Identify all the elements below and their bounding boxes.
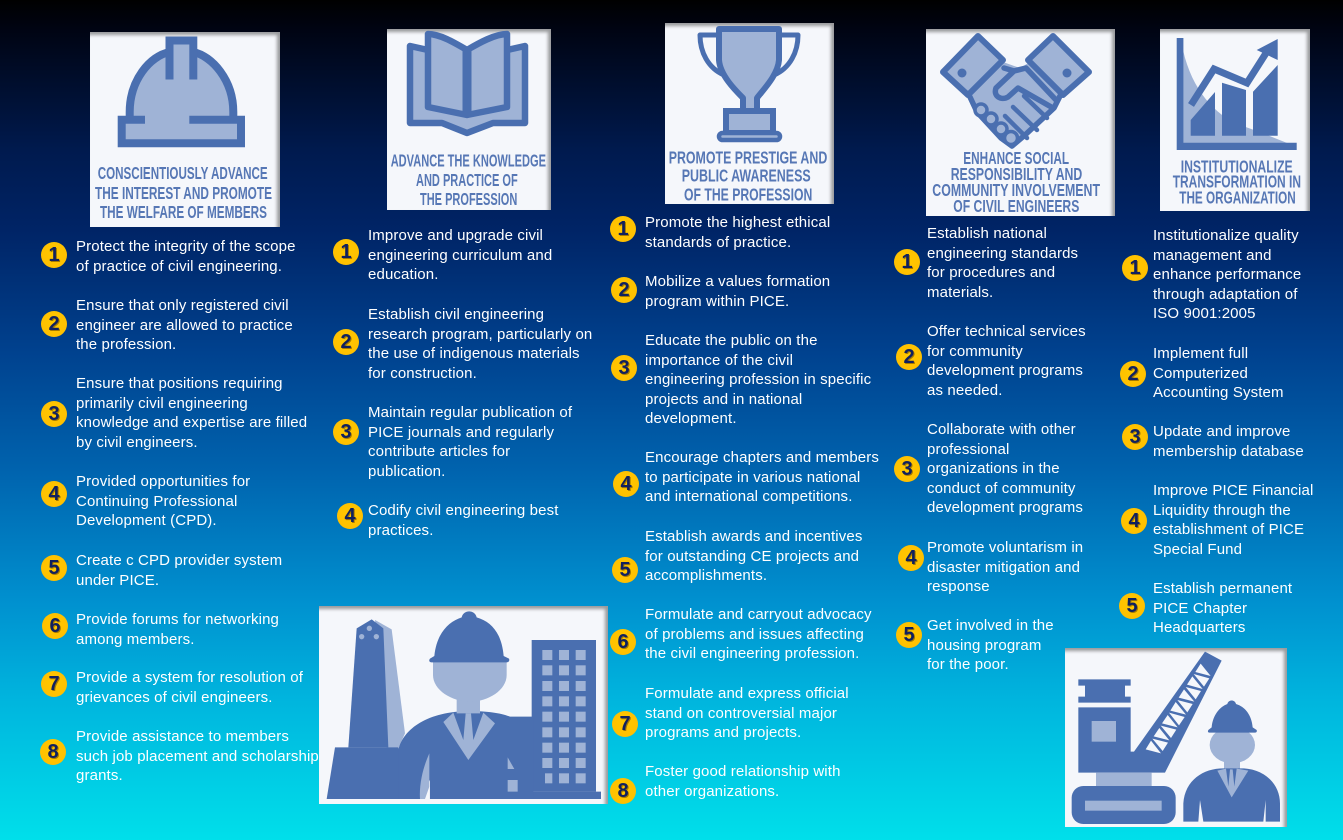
objective 1: 1 (340, 241, 352, 263)
objective 4 (613, 449, 879, 505)
objective 3: publication. (368, 463, 445, 480)
objective 1: 1 (1129, 257, 1141, 279)
objective 4 (1121, 482, 1313, 558)
objective 8: Provide assistance to members (76, 728, 289, 745)
objective 3: development programs (927, 499, 1083, 516)
objective 3: contribute articles for (368, 443, 510, 460)
objective 2: 2 (903, 346, 915, 368)
heading: welfare of members (95, 163, 272, 222)
objective 4: Continuing Professional (76, 493, 237, 510)
objective 8: Foster good relationship with (645, 763, 841, 780)
objective 4: Liquidity through the (1153, 502, 1291, 519)
objective 2: the profession. (76, 336, 176, 353)
objective 3 (611, 332, 871, 427)
objective 8: other organizations. (645, 783, 779, 800)
heading: institutionalize transformation (1173, 157, 1301, 207)
objective 5: accomplishments. (645, 567, 767, 584)
objective 7: 7 (619, 713, 631, 735)
objective 1 (894, 225, 1078, 301)
icon: growth chart (1177, 38, 1297, 150)
objective 2: Offer technical services (927, 323, 1086, 340)
icon: trophy (700, 29, 798, 140)
objective 2 (41, 297, 293, 353)
objective 5: for the poor. (927, 656, 1009, 673)
objective 5: 5 (1126, 595, 1138, 617)
objective 4: to participate in various national (645, 469, 860, 486)
objective 1: for procedures and (927, 264, 1055, 281)
objective 7: Provide a system for resolution of (76, 669, 303, 686)
objective 3: organizations in the (927, 460, 1060, 477)
objective 5: under PICE. (76, 572, 159, 589)
objective 3: engineering profession in specific (645, 371, 871, 388)
objective 3: membership database (1153, 443, 1304, 460)
objective 2: Computerized (1153, 365, 1248, 382)
objective 5 (1119, 580, 1292, 636)
objective 3: Ensure that positions requiring (76, 375, 283, 392)
icon: crane and engineer (1072, 652, 1280, 824)
objective 2 (611, 273, 830, 310)
objective 5: 5 (903, 624, 915, 646)
objective 1 (610, 214, 830, 251)
heading: social responsibility (932, 148, 1100, 216)
objective 2: Implement full (1153, 345, 1248, 362)
objective 4 (898, 539, 1083, 595)
objective 1: 1 (901, 251, 913, 273)
objective 5 (896, 617, 1054, 673)
objective 4 (337, 502, 559, 539)
column: welfare of members objectives (40, 238, 319, 784)
objective 4: response (927, 578, 990, 595)
objective 1 (41, 238, 296, 275)
objective 2: Mobilize a values formation (645, 273, 830, 290)
icon: handshake (943, 36, 1089, 146)
objective 3: development. (645, 410, 737, 427)
objective 7 (612, 685, 849, 741)
objective 3: 3 (48, 403, 60, 425)
objective 5: Get involved in the (927, 617, 1054, 634)
objective 5 (41, 552, 282, 589)
objective 4: Promote voluntarism in (927, 539, 1083, 556)
objective 5 (612, 528, 862, 584)
objective 1 (1122, 227, 1301, 322)
objective 3: primarily civil engineering (76, 395, 248, 412)
objective 8: such job placement and scholarship (76, 748, 319, 765)
objective 5: Establish permanent (1153, 580, 1292, 597)
objective 5: Create c CPD provider system (76, 552, 282, 569)
objective 3 (1122, 423, 1304, 460)
objective 1: Institutionalize quality (1153, 227, 1299, 244)
objective 1: standards of practice. (645, 234, 791, 251)
objective 4: 4 (48, 483, 60, 505)
objective 2: for community (927, 343, 1023, 360)
objective 4: Special Fund (1153, 541, 1242, 558)
objective 2: Accounting System (1153, 384, 1284, 401)
objective 8: grants. (76, 767, 123, 784)
objective 5: for outstanding CE projects and (645, 548, 859, 565)
objective 4: 4 (1128, 510, 1140, 532)
objective 1: materials. (927, 284, 993, 301)
objective 3: by civil engineers. (76, 434, 198, 451)
objective 3: Educate the public on the (645, 332, 818, 349)
objective 8: 8 (617, 780, 629, 802)
column: knowledge and practice objectives (333, 227, 592, 539)
objective 2: 2 (340, 331, 352, 353)
heading: knowledge and practice (391, 151, 546, 209)
objective 1: engineering curriculum and (368, 247, 552, 264)
objective 2: the use of indigenous materials (368, 345, 580, 362)
objective 8 (40, 728, 319, 784)
objective 1: through adaptation of (1153, 286, 1298, 303)
objective 6 (42, 611, 279, 648)
objective 3: projects and in national (645, 391, 802, 408)
objective 4: and international competitions. (645, 488, 852, 505)
column: prestige and awareness objectives (610, 214, 879, 804)
objective 2: as needed. (927, 382, 1003, 399)
objective 3: Maintain regular publication of (368, 404, 572, 421)
objective 7 (41, 669, 303, 706)
objective 3 (894, 421, 1083, 516)
objective 2: engineer are allowed to practice (76, 317, 293, 334)
objective 4: disaster mitigation and (927, 559, 1080, 576)
objective 6: Formulate and carryout advocacy (645, 606, 872, 623)
objective 6: among members. (76, 631, 195, 648)
objective 2: Establish civil engineering (368, 306, 544, 323)
objective 7: grievances of civil engineers. (76, 689, 272, 706)
objective 4: Encourage chapters and members (645, 449, 879, 466)
objective 8: 8 (47, 741, 59, 763)
objective 1: of practice of civil engineering. (76, 258, 282, 275)
objective 2 (896, 323, 1086, 399)
objective 4: establishment of PICE (1153, 521, 1304, 538)
panel: hard hat, advance the welfare of members (90, 32, 280, 227)
objective 1: 1 (48, 244, 60, 266)
objective 2: for construction. (368, 365, 477, 382)
column: institutional transformation objectives (1119, 227, 1313, 636)
objective 3: importance of the civil (645, 352, 793, 369)
objective 1: engineering standards (927, 245, 1078, 262)
objective 5: 5 (48, 557, 60, 579)
objective 3: conduct of community (927, 480, 1076, 497)
objective 1: Establish national (927, 225, 1047, 242)
objective 3: knowledge and expertise are filled (76, 414, 307, 431)
objective 5: Headquarters (1153, 619, 1245, 636)
objective 1: enhance performance (1153, 266, 1301, 283)
objective 5: 5 (619, 559, 631, 581)
objective 2: 2 (618, 279, 630, 301)
icon: open book (410, 34, 525, 133)
objective 1: ISO 9001:2005 (1153, 305, 1256, 322)
objective 2: program within PICE. (645, 293, 789, 310)
objective 7: programs and projects. (645, 724, 801, 741)
objective 8 (610, 763, 841, 804)
objective 6: the civil engineering profession. (645, 645, 859, 662)
objective 1: 1 (617, 218, 629, 240)
objective 5: housing program (927, 637, 1042, 654)
objective 2 (1120, 345, 1284, 401)
objective 4 (41, 473, 250, 529)
objective 1: Protect the integrity of the scope (76, 238, 296, 255)
objective 2: research program, particularly on (368, 326, 592, 343)
objective 4: practices. (368, 522, 434, 539)
objective 4: Provided opportunities for (76, 473, 250, 490)
objective 3: 3 (340, 421, 352, 443)
objective 4: Improve PICE Financial (1153, 482, 1313, 499)
illustration panel: engineer with tower and building (319, 606, 608, 804)
panel: handshake, social responsibility (926, 29, 1115, 216)
objective 5: Establish awards and incentives (645, 528, 862, 545)
objective 3: 3 (618, 357, 630, 379)
objective 3 (41, 375, 307, 451)
objective 3: 3 (901, 458, 913, 480)
objective 3: Collaborate with other (927, 421, 1076, 438)
objective 1: Improve and upgrade civil (368, 227, 543, 244)
objective 7: stand on controversial major (645, 705, 837, 722)
icon: hard hat (122, 40, 241, 143)
objective 3: professional (927, 441, 1009, 458)
objective 6: 6 (49, 615, 61, 637)
objective 3: Update and improve (1153, 423, 1290, 440)
objective 4: 4 (905, 547, 917, 569)
objective 3: PICE journals and regularly (368, 424, 554, 441)
objective 6: of problems and issues affecting (645, 626, 864, 643)
objective 7: Formulate and express official (645, 685, 849, 702)
icon: engineer, tower and building (327, 611, 601, 799)
objective 2: 2 (48, 313, 60, 335)
objective 2: 2 (1127, 363, 1139, 385)
objective 2 (333, 306, 592, 382)
objective 4: 4 (620, 473, 632, 495)
objective 2: Ensure that only registered civil (76, 297, 289, 314)
objective 6 (610, 606, 872, 662)
objective 6: Provide forums for networking (76, 611, 279, 628)
objective 5: PICE Chapter (1153, 600, 1247, 617)
objective 1 (333, 227, 552, 283)
objective 7: 7 (48, 673, 60, 695)
objective 4: 4 (344, 505, 356, 527)
objective 6: 6 (617, 631, 629, 653)
objective 4: Development (CPD). (76, 512, 217, 529)
heading: prestige and awareness (669, 147, 827, 205)
panel: open book, advance the knowledge (387, 29, 551, 210)
objective 2: development programs (927, 362, 1083, 379)
objective 1: education. (368, 266, 439, 283)
panel: trophy, promote prestige (665, 23, 834, 204)
objective 1: management and (1153, 247, 1272, 264)
objective 3: 3 (1129, 426, 1141, 448)
objective 1: Promote the highest ethical (645, 214, 830, 231)
objective 4: Codify civil engineering best (368, 502, 559, 519)
objective 3 (333, 404, 572, 480)
illustration panel: crane and engineer (1065, 648, 1287, 827)
panel: growth chart, institutionalize transformation (1160, 29, 1310, 211)
column: social responsibility objectives (894, 225, 1086, 673)
